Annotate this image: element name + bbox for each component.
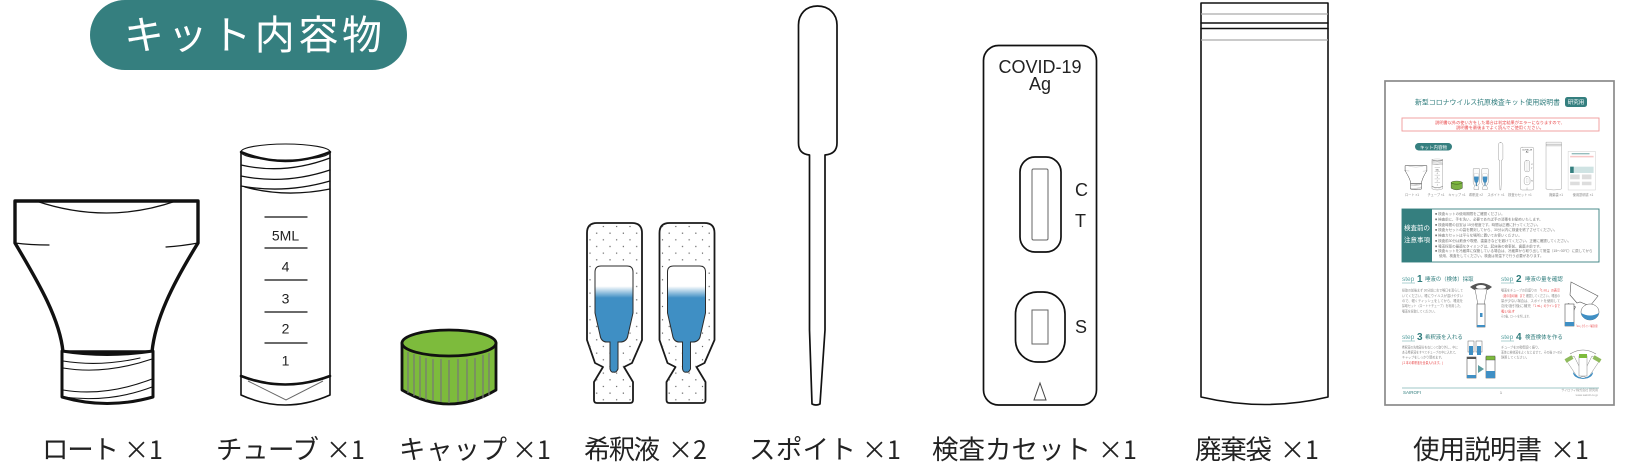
manual: pre-test notes panel: 使用、検査をしてください。検査は常温下で行う必要があります。 [1439,253,1543,258]
item: tube: 1 [282,352,290,368]
item: tube: 5ML [272,228,299,244]
caption: pipette [749,431,901,464]
manual: step 4: 液体に検体液をよくなじませて、その後 2〜3分 [1501,350,1563,354]
manual: step 2: （液の泡の線）まで [1501,293,1525,298]
item: instruction manual [1385,81,1614,405]
manual: step 3: ある希釈液をすべてチューブの中に入れて、 [1402,350,1458,354]
caption: cassette [932,431,1137,464]
manual: step 1: 唾液を採取してください。 [1402,308,1437,313]
manual: mini kit captions: チューブ ×1 [1427,192,1445,197]
manual: mini kit captions [1405,192,1593,197]
step 2 illustration: 「1mL」のライン（唾液の泡） [1575,323,1599,328]
manual: kit contents pill [1415,143,1452,151]
manual: mini kit captions: 検査カセット ×1 [1508,192,1532,197]
manual: pre-test notes panel [1402,209,1599,262]
manual: step 2: 唾液の量を確認 [1525,275,1563,283]
manual: step 1: step [1402,276,1415,283]
manual: mini kit captions: 使用説明書 ×1 [1573,192,1593,197]
step 1 illustration [1470,283,1492,327]
manual: kit contents pill: キット内容物 [1420,144,1447,151]
manual: pre-test notes panel: ■ 検査キットの使用期限をご確認ください。 [1435,211,1505,216]
manual: mini kit captions: スポイト ×1 [1487,192,1505,197]
title: kit contents pill [90,0,407,70]
item: tube: 4 [282,258,290,274]
manual: pre-test notes panel: ■ 検査キットを冷蔵庫に保管している場合は、冷蔵庫から取り出して常温（15～30℃）に戻してから [1435,248,1593,253]
manual: pre-test notes panel: ■ 唾液採取の最適なタイミングは、起床後の食事前、歯磨き前です。 [1435,243,1543,248]
item: test cassette: C [1075,180,1088,200]
manual: mini kit captions: キャップ ×1 [1448,192,1466,197]
caption: diluent [584,431,707,464]
manual: step 2: 量が少ない場合は、スポイトを使用して [1501,298,1560,303]
manual: step 1: 採取の前後まず 30分前に水で喉口を濡らして [1402,288,1463,292]
manual: warning box: 説明書以外の使い方をした場合は判定結果がエラーになりますので、 [1435,119,1565,126]
caption: funnel [42,431,163,464]
item: tube [241,144,330,405]
manual: step 4: 検査検体を作る [1525,333,1563,341]
manual: title: 新型コロナウイルス抗原検査キット使用説明書 [1415,98,1560,106]
step 3 illustration [1467,341,1495,378]
item: tube: 2 [282,320,290,336]
item: test cassette: T [1075,211,1086,231]
manual: pre-test notes panel: ■ 検査前に、手を洗い、必要であれば手の消毒をお勧めいたします。 [1435,216,1543,221]
manual: step 3 [1402,332,1495,378]
manual: step 3: 3 [1417,332,1423,343]
manual: step 3: step [1402,334,1415,341]
manual: step 4: 4 [1516,332,1522,343]
manual: title [1415,97,1587,107]
manual: step 2 [1501,274,1599,328]
item: diluent ampoules [587,223,714,403]
manual: warning box [1402,118,1599,131]
manual: step 3: 希釈液の先端部分をねじって取り外し、中に [1402,344,1458,350]
manual: step 2: 「1 mL」のラインまで [1532,303,1560,308]
manual: footer [1402,387,1599,397]
manual: title: 研究用 [1568,98,1584,106]
manual: pre-test notes panel: ■ 検査カセットの袋を開封してから、30分以内に検査を終了させてください。 [1435,227,1557,232]
manual: step 2: その後、ロートを外します。 [1501,314,1531,319]
manual: step 1: いてください。唾にウイルスが溶けやすい [1402,293,1463,298]
manual: step 1 [1402,274,1492,327]
manual: step 4: チューブを30秒間良く振り、 [1501,344,1541,350]
manual: step 2: 泡を吸引後に補充 [1501,303,1532,308]
manual: footer: サイロフィ株式会社 研究用 [1561,387,1598,392]
ampoule right [660,223,714,403]
manual: step 2: 吸い出す [1501,308,1515,313]
manual: step 2: 唾液をチューブの目盛りの [1501,288,1537,292]
manual: step 3: キャップをしっかり閉めます。 [1402,354,1444,360]
caption: cap [399,431,551,464]
manual: footer: www.sairofi.co.jp [1576,393,1598,397]
manual: footer: SAIROFI [1403,390,1421,395]
item: cap [402,330,496,404]
manual: step 2: 「1 mL」の表示 [1538,288,1560,292]
manual: mini kit captions: ロート ×1 [1405,193,1419,197]
caption: manual [1413,431,1589,464]
caption: tube [216,431,365,464]
manual: mini kit captions: 希釈液 ×2 [1469,192,1483,197]
step 4 illustration [1565,350,1601,379]
manual: step 1: 採取セット（ロート＋チューブ）を利用した、 [1402,303,1463,308]
item: test cassette: COVID-19 [998,57,1082,77]
manual: step 2: 確認してください。唾液の [1526,293,1560,298]
manual: pre-test notes panel: 注意事項 [1404,235,1430,244]
manual: step 1: ので、軽くティッシュをしてから、唾液を [1402,298,1463,303]
manual: step 3: (２本の希釈液を全量入れます。) [1402,360,1443,365]
manual: step 2: 2 [1516,274,1522,285]
title: kit contents pill: キット内容物 [124,14,382,58]
manual: pre-test notes panel: ■ 検査前30分は飲食や喫煙、歯磨きなどを避けてください。正確に確認してください。 [1435,238,1571,243]
manual: pre-test notes panel: 検査前の [1404,223,1430,232]
manual: step 4: 静置してください。 [1501,354,1529,360]
manual: step 3: 希釈液を入れる [1425,333,1463,341]
item: test cassette [984,46,1096,405]
manual: step 2: step [1501,276,1514,283]
item: test cassette: Ag [1029,74,1051,94]
item: tube: 3 [282,290,290,306]
item: pipette [798,6,837,405]
manual: mini kit captions: 廃棄袋 ×1 [1549,192,1563,197]
manual: pre-test notes panel: ■ 検査カセットは平らな場所に置いてお使いください。 [1435,233,1522,238]
manual: step 1: 1 [1417,274,1423,285]
item: funnel [15,201,198,404]
manual: step 4: step [1501,334,1514,341]
manual: step 1: 唾液の（検体）採取 [1425,275,1474,283]
item: disposal bag [1201,3,1328,404]
manual: pre-test notes panel: ■ 検査時間の目安は 15分程度です。時間は正確に計ってください。 [1435,222,1540,227]
ampoule left [587,223,642,403]
caption: bag [1195,431,1319,464]
manual: warning box: 説明書を最後までよく読んでご使用ください。 [1456,124,1544,131]
item: test cassette: S [1075,317,1087,337]
manual: mini kit illustrations [1405,142,1595,190]
manual: footer: 1 [1500,391,1502,395]
manual: step 4 [1501,332,1601,379]
